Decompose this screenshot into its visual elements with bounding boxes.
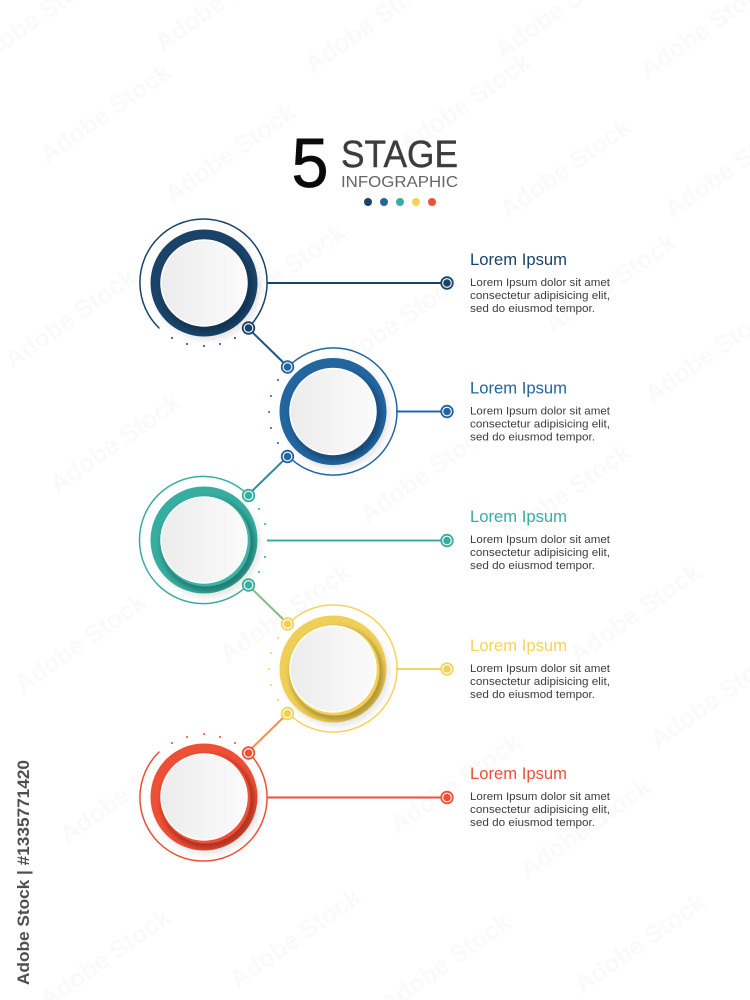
text block: stage 2 bbox=[470, 380, 610, 444]
body: stage 1 bbox=[470, 277, 610, 315]
body: stage 5: sed do eiusmod tempor. bbox=[470, 817, 595, 829]
infographic canvas: Adobe Stock bbox=[0, 263, 141, 374]
body: stage 3: sed do eiusmod tempor. bbox=[470, 560, 595, 572]
text block: stage 1 bbox=[470, 251, 610, 315]
stage 2 connector line bbox=[396, 410, 447, 412]
infographic canvas: Adobe Stock bbox=[210, 218, 351, 329]
stage 2 outer arc bbox=[288, 348, 397, 475]
body: stage 5: Lorem Ipsum dolor sit amet bbox=[470, 791, 610, 803]
stage 4 outer arc bbox=[288, 605, 397, 732]
title word: stage: STAGE bbox=[341, 134, 458, 176]
stage 5 outer arc bbox=[140, 752, 267, 861]
title bbox=[292, 124, 458, 206]
title number: 5 bbox=[292, 124, 328, 202]
subtitle: infographic: INFOGRAPHIC bbox=[341, 174, 458, 191]
stage 3 end node bbox=[441, 535, 453, 546]
stage 4 connector line bbox=[396, 668, 447, 670]
body: stage 1: consectetur adipisicing elit, bbox=[470, 290, 610, 302]
infographic canvas: Adobe Stock bbox=[45, 388, 186, 499]
heading: stage 3: Lorem Ipsum bbox=[470, 508, 567, 526]
heading: stage 1: Lorem Ipsum bbox=[470, 251, 567, 269]
infographic canvas: Adobe Stock bbox=[495, 438, 636, 549]
body: stage 4: sed do eiusmod tempor. bbox=[470, 689, 595, 701]
stage 3 lower node bbox=[243, 579, 254, 591]
infographic canvas: Adobe Stock bbox=[55, 738, 196, 849]
body: stage 1: sed do eiusmod tempor. bbox=[470, 303, 595, 315]
stage 2 upper node bbox=[282, 361, 293, 373]
heading: stage 4: Lorem Ipsum bbox=[470, 637, 567, 655]
stage 1 lower node bbox=[243, 322, 254, 334]
infographic canvas: Adobe Stock bbox=[10, 588, 151, 699]
stage 4 bbox=[268, 605, 453, 732]
stage 3 outer arc bbox=[139, 476, 248, 604]
connector: stage 2 to 3 bbox=[248, 456, 288, 495]
body: stage 4: consectetur adipisicing elit, bbox=[470, 676, 610, 688]
stage 3 upper node bbox=[243, 490, 254, 501]
stage 4 upper node bbox=[282, 618, 293, 630]
infographic canvas: Adobe Stock bbox=[385, 728, 526, 839]
infographic canvas: Adobe Stock bbox=[495, 113, 636, 224]
body: stage 4: Lorem Ipsum dolor sit amet bbox=[470, 663, 610, 675]
infographic canvas bbox=[17, 138, 610, 985]
stage 1 bbox=[140, 219, 453, 347]
stage 3 bbox=[139, 476, 453, 604]
infographic canvas: Adobe Stock bbox=[570, 888, 711, 999]
heading: stage 5: Lorem Ipsum bbox=[470, 765, 567, 783]
connector: stage 4 to 5 bbox=[248, 713, 288, 752]
stage 4 lower node bbox=[282, 708, 293, 719]
infographic canvas: Adobe Stock bbox=[355, 418, 496, 529]
infographic canvas: Adobe Stock bbox=[395, 48, 536, 159]
stage 1 end node bbox=[441, 277, 453, 289]
body: stage 5: consectetur adipisicing elit, bbox=[470, 804, 610, 816]
heading: stage 2: Lorem Ipsum bbox=[470, 380, 567, 398]
infographic canvas: Adobe Stock bbox=[515, 773, 656, 884]
body: stage 3: consectetur adipisicing elit, bbox=[470, 547, 610, 559]
stage 3 dots bbox=[258, 508, 266, 573]
infographic canvas: Adobe Stock bbox=[225, 883, 366, 994]
text block: stage 3 bbox=[470, 508, 610, 572]
stage 3 connector line bbox=[267, 540, 447, 542]
stage 5 upper node bbox=[243, 747, 254, 759]
stage 5 connector line bbox=[267, 796, 447, 798]
body: stage 1: Lorem Ipsum dolor sit amet bbox=[470, 277, 610, 289]
text block: stage 4 bbox=[470, 637, 610, 701]
infographic canvas: Adobe Stock bbox=[35, 58, 176, 169]
stage 4 end node bbox=[441, 663, 453, 675]
title colour dots bbox=[364, 198, 436, 206]
stage 1 dots bbox=[171, 337, 236, 347]
stage 1 outer arc bbox=[140, 219, 267, 328]
body: stage 2: consectetur adipisicing elit, bbox=[470, 418, 610, 430]
body: stage 3: Lorem Ipsum dolor sit amet bbox=[470, 534, 610, 546]
stage 2 bbox=[268, 348, 453, 475]
infographic canvas: Adobe Stock bbox=[540, 228, 681, 339]
infographic canvas: Adobe Stock bbox=[565, 558, 706, 669]
body: stage 4 bbox=[470, 663, 610, 701]
stock image id label: Adobe Stock | #1335771420 bbox=[14, 760, 33, 985]
stage 2 disc bbox=[280, 358, 389, 468]
stage 1 disc bbox=[150, 230, 260, 340]
body: stage 3 bbox=[470, 534, 610, 572]
text block: stage 5 bbox=[470, 765, 610, 829]
stage 2 end node bbox=[441, 406, 453, 417]
infographic canvas: Adobe Stock bbox=[160, 98, 301, 209]
stage 4 dots bbox=[268, 637, 279, 701]
body: stage 2 bbox=[470, 406, 610, 444]
connector: stage 3 to 4 bbox=[248, 585, 288, 624]
stage 3 disc bbox=[150, 486, 260, 597]
body: stage 5 bbox=[470, 791, 610, 829]
stage 1 connector line bbox=[267, 282, 447, 284]
infographic canvas: Adobe Stock bbox=[215, 558, 356, 669]
stage 5 bbox=[140, 733, 453, 861]
body: stage 2: sed do eiusmod tempor. bbox=[470, 432, 595, 444]
body: stage 2: Lorem Ipsum dolor sit amet bbox=[470, 406, 610, 418]
stage 4 disc bbox=[280, 616, 389, 726]
stage 5 end node bbox=[441, 792, 453, 803]
stage 2 lower node bbox=[282, 451, 293, 462]
stage 5 dots bbox=[171, 733, 236, 744]
infographic canvas: Adobe Stock bbox=[325, 268, 466, 379]
connector: stage 1 to 2 bbox=[248, 328, 288, 367]
stage 5 disc bbox=[150, 744, 260, 854]
stage 2 dots bbox=[268, 379, 279, 444]
